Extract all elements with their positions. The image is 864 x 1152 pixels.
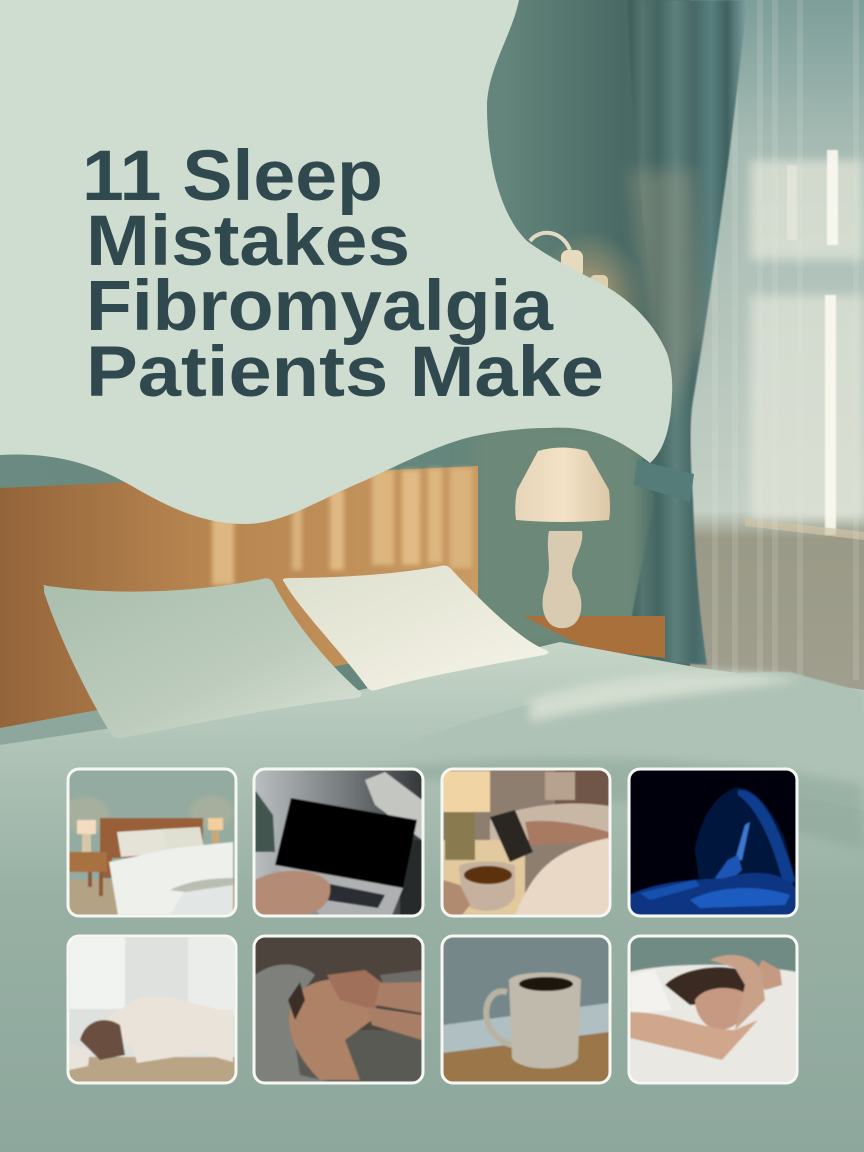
curtain warm light: [628, 170, 705, 420]
photo 5: person on floor: [69, 937, 235, 1082]
pillow: green: [43, 578, 362, 738]
duvet highlight: [530, 672, 800, 722]
title: Fibromyalgia: [86, 267, 554, 346]
curtain tie: [634, 460, 694, 502]
sunlight on headboard: [212, 468, 472, 585]
title panel blob: [0, 0, 672, 524]
title: Patients Make: [86, 333, 604, 412]
wall lamp glow: [535, 230, 645, 370]
title: 11 Sleep: [82, 137, 383, 216]
curtain: [628, 0, 747, 665]
nightstand: [523, 616, 665, 658]
title: [82, 137, 604, 412]
title: Mistakes: [86, 202, 410, 281]
photo 2: laptop: [255, 770, 422, 915]
photo 8: woman sleeping: [630, 937, 796, 1082]
window with sheer curtain: [690, 0, 864, 690]
photo 7: coffee mug: [443, 937, 609, 1082]
lower wall: [470, 420, 645, 650]
bed linen: [0, 642, 864, 1152]
photo 4: blue bedding in dark: [630, 770, 796, 915]
photo 1: bedroom: [61, 770, 235, 915]
photo frames: [68, 769, 797, 1083]
photo 6: woman rubbing eyes: [255, 937, 422, 1082]
pillow: cream: [283, 566, 549, 690]
photo 3: phone and coffee: [443, 770, 609, 915]
duvet: [345, 672, 864, 810]
wall sconce: [530, 233, 608, 291]
bedroom wall: [0, 0, 864, 700]
headboard: [0, 466, 478, 728]
table lamp: [515, 448, 610, 628]
